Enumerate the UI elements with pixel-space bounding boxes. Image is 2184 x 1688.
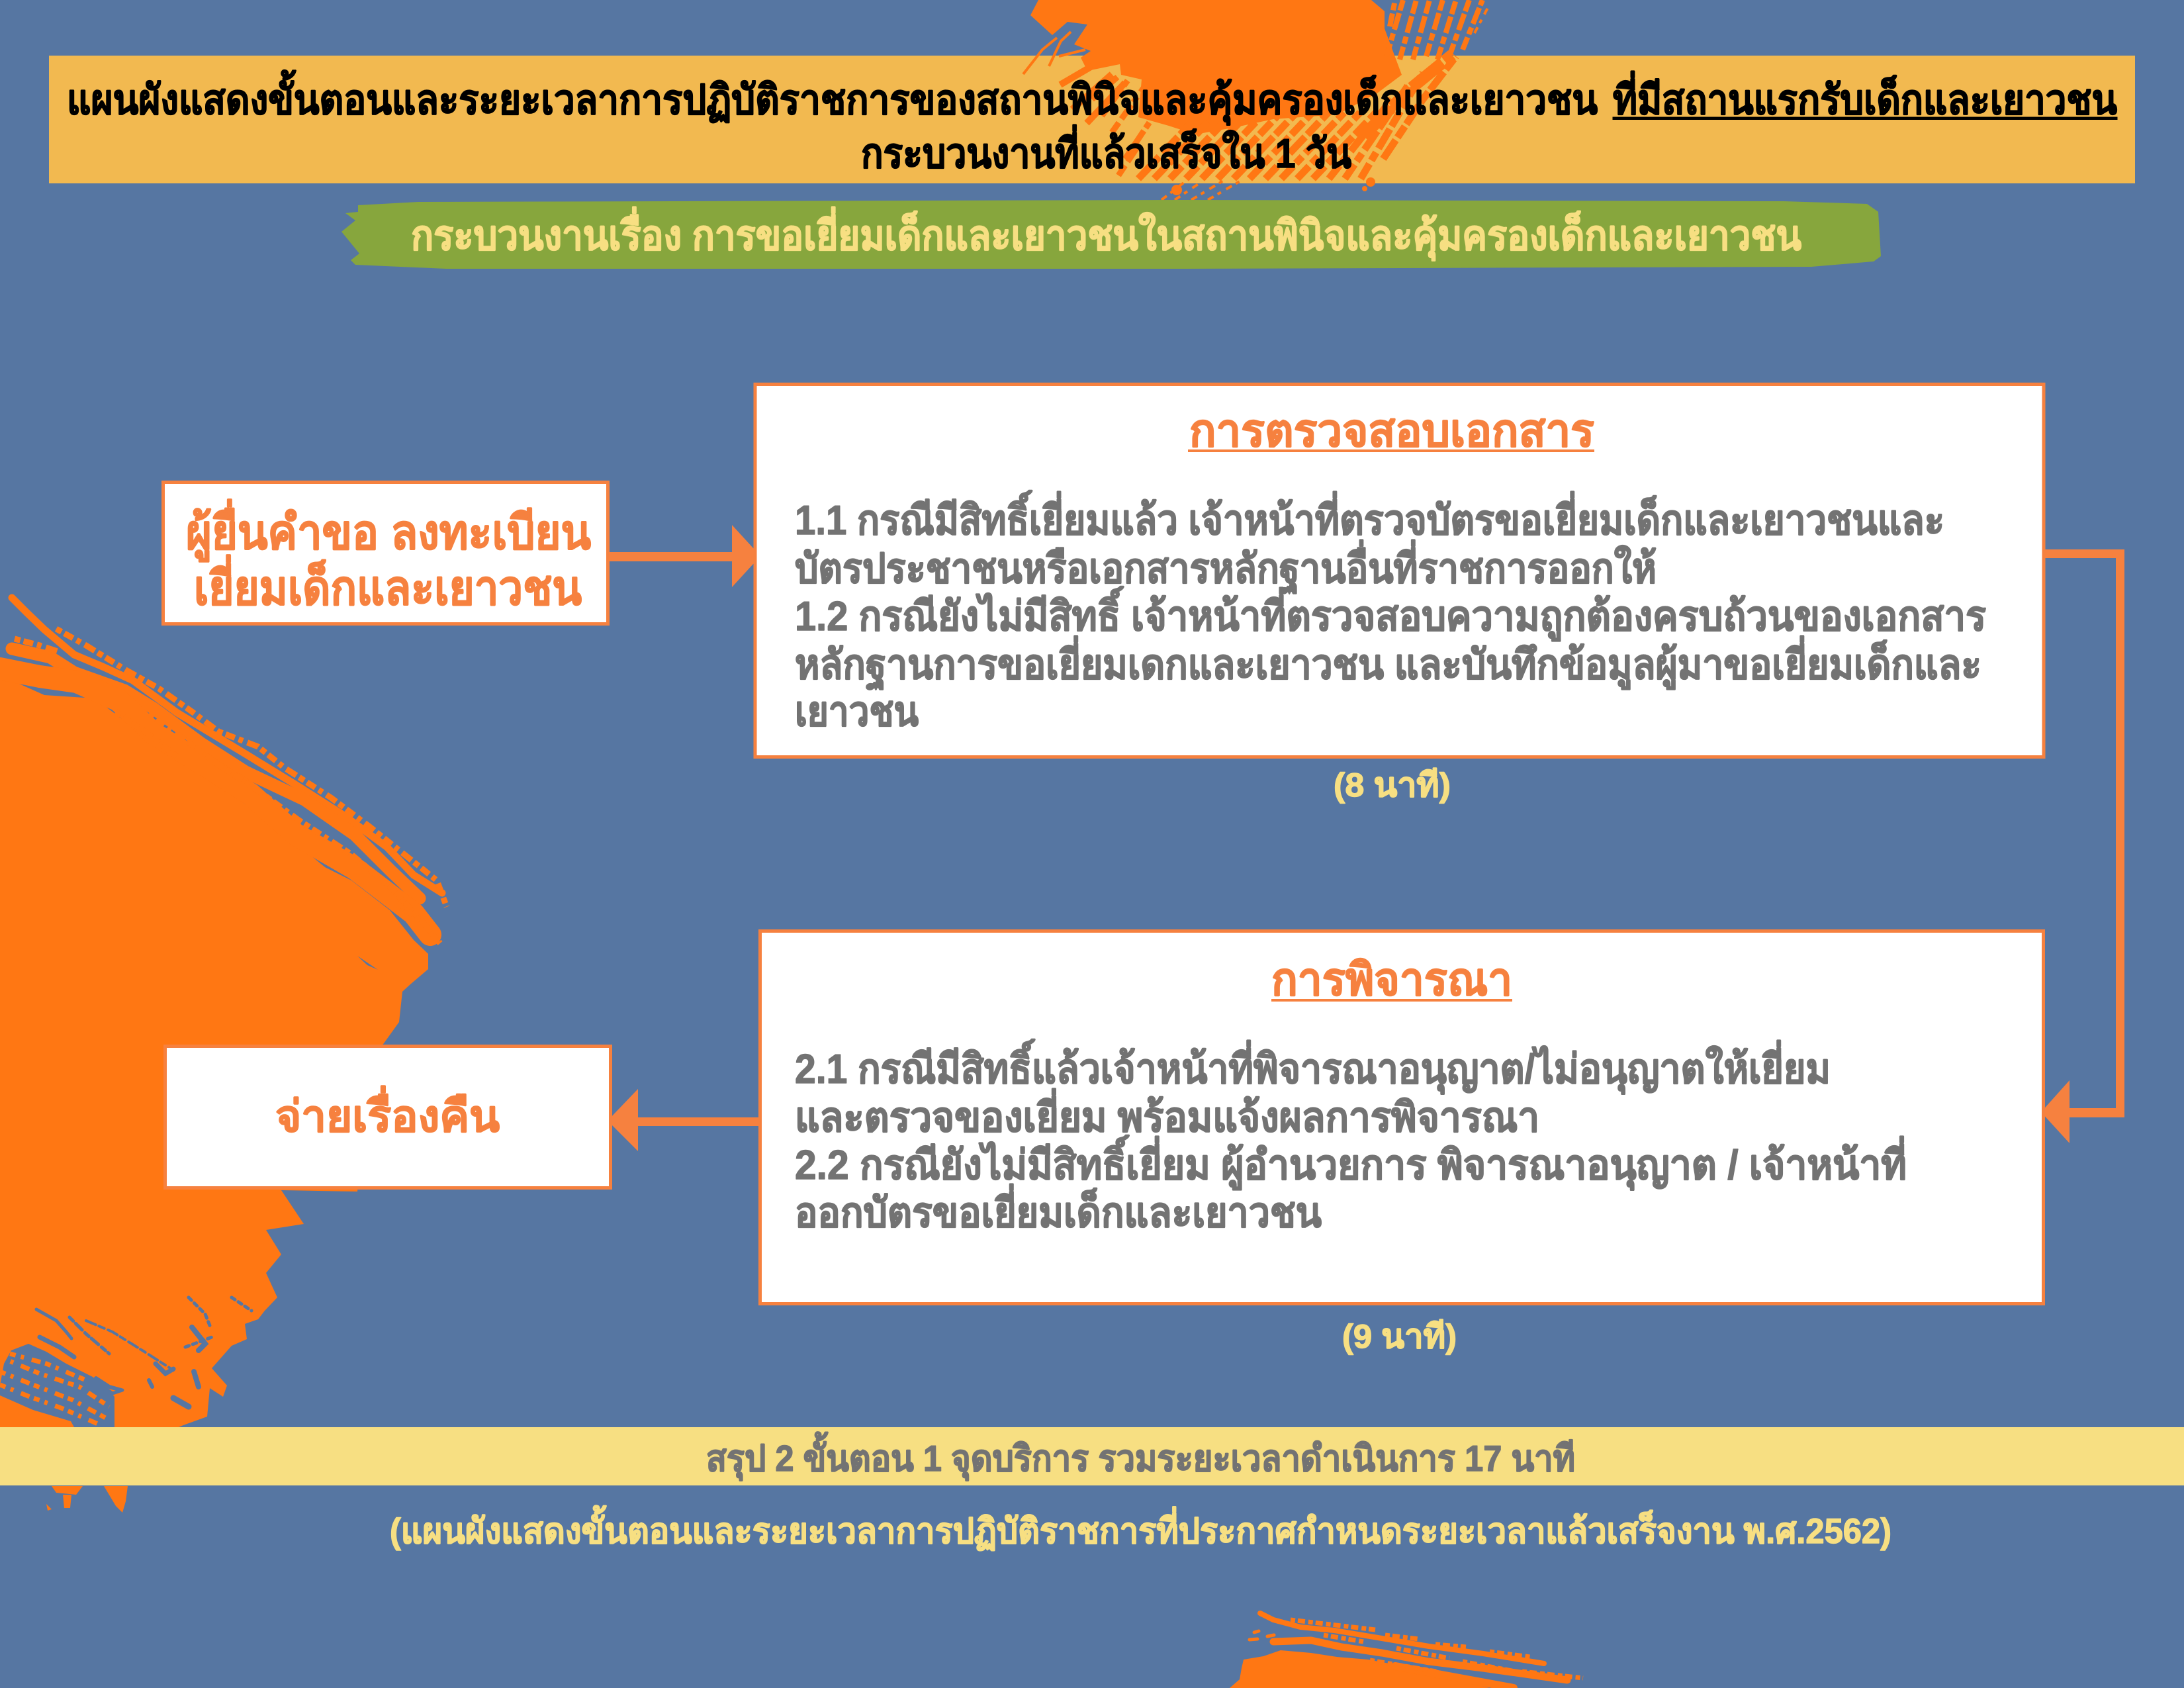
body text: document check <box>795 490 1986 735</box>
arrow: consideration to return <box>608 1089 758 1151</box>
summary bar <box>0 1427 2184 1485</box>
body text: document check: 1.2 กรณียังไม่มีสิทธิ์ เจ้าหน้าที่ตรวจสอบความถูกต้องครบถ้วนของเอกสาร <box>795 586 1986 641</box>
body text: consideration: ออกบัตรขอเยี่ยมเด็กและเยาวชน <box>795 1184 1322 1236</box>
title text: กระบวนงานที่แล้วเสร็จใน 1 วัน <box>861 124 1351 177</box>
body text: document check: บัตรประชาชนหรือเอกสารหลักฐานอื่นที่ราชการออกให้ <box>795 539 1657 595</box>
box: applicant: ผู้ยื่นคำขอ ลงทะเบียน <box>186 498 591 563</box>
body text: consideration: 2.2 กรณียังไม่มีสิทธิ์เยี่ยม ผู้อำนวยการ พิจารณาอนุญาต / เจ้าหน้าที่ <box>795 1135 1907 1190</box>
panel: document check <box>755 384 2044 757</box>
body text: consideration: 2.1 กรณีมีสิทธิ์แล้วเจ้าหน้าที่พิจารณาอนุญาต/ไม่อนุญาตให้เยี่ยม <box>795 1039 1831 1094</box>
footer note: (แผนผังแสดงขั้นตอนและระยะเวลาการปฏิบัติราชการที่ประกาศกำหนดระยะเวลาแล้วเสร็จงาน พ.ศ.2562) <box>390 1505 1891 1551</box>
subtitle text: กระบวนงานเรื่อง การขอเยี่ยมเด็กและเยาวชนในสถานพินิจและคุ้มครองเด็กและเยาวชน <box>411 207 1801 261</box>
slit <box>357 956 378 970</box>
arrow: applicant to document check <box>610 525 760 587</box>
box: return: จ่ายเรื่องคืน <box>275 1085 500 1141</box>
box: applicant: เยี่ยมเด็กและเยาวชน <box>194 554 582 615</box>
green subtitle brush banner <box>341 200 1881 269</box>
upper streaks <box>0 598 447 943</box>
bottom orange brush stroke <box>1230 1613 1583 1688</box>
body text: document check: เยาวชน <box>795 689 919 735</box>
body text: consideration <box>795 1039 1907 1236</box>
box: applicant <box>163 482 608 624</box>
title text <box>67 70 2117 177</box>
body text: document check: หลักฐานการขอเยี่ยมเดกและเยาวชน และบันทึกข้อมูลผู้มาขอเยี่ยมเด็กและ <box>795 635 1981 691</box>
heading: document check: การตรวจสอบเอกสาร <box>1189 406 1594 456</box>
time label: 9 minutes: (9 นาที) <box>1342 1318 1457 1355</box>
time label: 8 minutes: (8 นาที) <box>1334 767 1451 804</box>
panel: consideration <box>760 931 2044 1304</box>
flecks below yellow bar <box>46 1486 128 1513</box>
body text: consideration: และตรวจของเยี่ยม พร้อมแจ้งผลการพิจารณา <box>795 1088 1539 1141</box>
top orange brush stroke <box>1023 0 1489 200</box>
title text: แผนผังแสดงขั้นตอนและระยะเวลาการปฏิบัติราชการของสถานพินิจและคุ้มครองเด็กและเยาวชน <box>67 70 1598 125</box>
heading: consideration: การพิจารณา <box>1271 955 1512 1005</box>
left orange brush stroke <box>0 598 447 1513</box>
title banner background <box>49 56 2135 183</box>
body text: document check: 1.1 กรณีมีสิทธิ์เยี่ยมแล้ว เจ้าหน้าที่ตรวจบัตรขอเยี่ยมเด็กและเยาวชนและ <box>795 490 1944 543</box>
box: return <box>165 1046 610 1188</box>
lower left texture <box>0 1344 114 1427</box>
speckle fringe <box>15 629 447 943</box>
summary bar: สรุป 2 ขั้นตอน 1 จุดบริการ รวมระยะเวลาดำเนินการ 17 นาที <box>706 1432 1575 1481</box>
title text: ที่มีสถานแรกรับเด็กและเยาวชน <box>1613 71 2117 123</box>
connector arrow: document check to consideration <box>2041 549 2124 1143</box>
